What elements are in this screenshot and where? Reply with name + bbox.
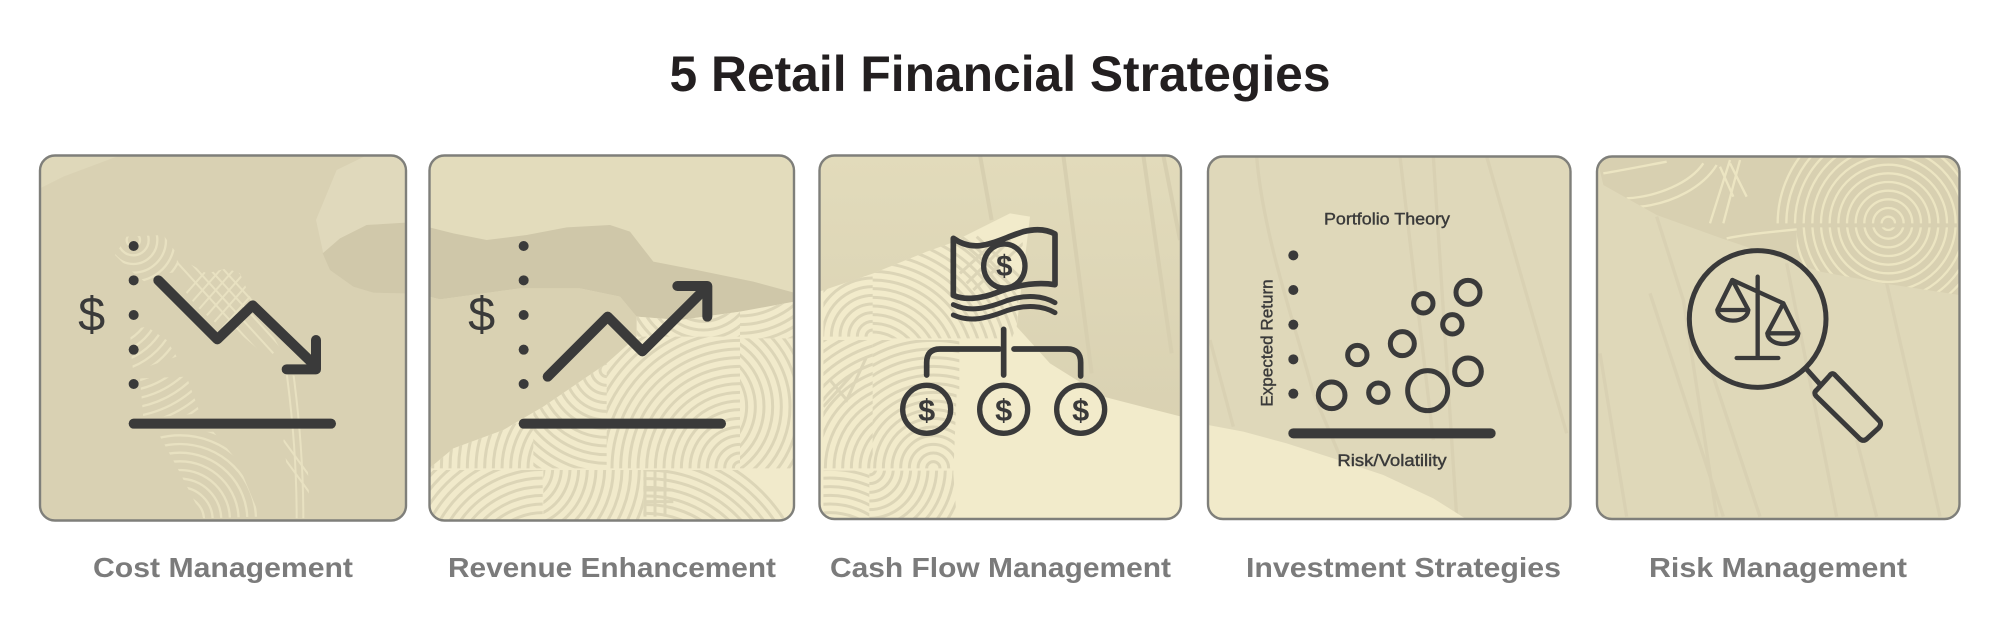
connector tree — [927, 329, 1081, 376]
magnifier — [1689, 251, 1881, 440]
icon: banknote with distribution tree — [903, 230, 1105, 433]
banknote — [953, 230, 1055, 319]
panel: Risk Management — [1598, 158, 1958, 518]
three coins: $ — [1072, 393, 1089, 427]
y axis dots — [1288, 250, 1298, 399]
card background with texture — [41, 156, 405, 520]
card background with texture — [1208, 157, 1571, 519]
three coins: $ — [918, 393, 935, 427]
x axis label: Risk/Volatility — [1337, 451, 1447, 470]
three coins: $ — [995, 393, 1012, 427]
label: Investment Strategies: Investment Strategies — [1246, 552, 1561, 583]
three coins — [903, 385, 1105, 433]
balance scales — [1717, 277, 1798, 358]
chart: portfolio theory scatter — [1258, 210, 1491, 470]
panel: Investment Strategies — [1208, 157, 1571, 519]
x axis — [1293, 418, 1491, 448]
label: Cost Management: Cost Management — [93, 552, 353, 583]
icon: magnifier with scales — [1689, 251, 1881, 440]
icon: falling line chart: $ — [78, 288, 105, 342]
scatter circles — [1318, 280, 1481, 411]
icon: rising line chart — [468, 241, 721, 424]
card background with texture — [1598, 158, 1958, 518]
card background with texture — [820, 156, 1180, 518]
chart title: Portfolio Theory — [1324, 210, 1451, 229]
icon: falling line chart — [78, 241, 331, 424]
label: Cash Flow Management: Cash Flow Management — [830, 552, 1171, 583]
title: 5 Retail Financial Strategies — [670, 46, 1330, 102]
card outlines — [40, 156, 1960, 520]
panel: Revenue Enhancement — [430, 156, 793, 520]
label: Risk Management: Risk Management — [1649, 552, 1907, 583]
y axis label: Expected Return — [1258, 279, 1277, 407]
banknote: $ — [996, 250, 1012, 283]
panel: Cost Management — [41, 156, 405, 520]
panel: Cash Flow Management — [820, 156, 1180, 518]
icon: rising line chart: $ — [468, 288, 495, 342]
card background with texture — [430, 156, 793, 520]
label: Revenue Enhancement: Revenue Enhancement — [448, 552, 776, 583]
